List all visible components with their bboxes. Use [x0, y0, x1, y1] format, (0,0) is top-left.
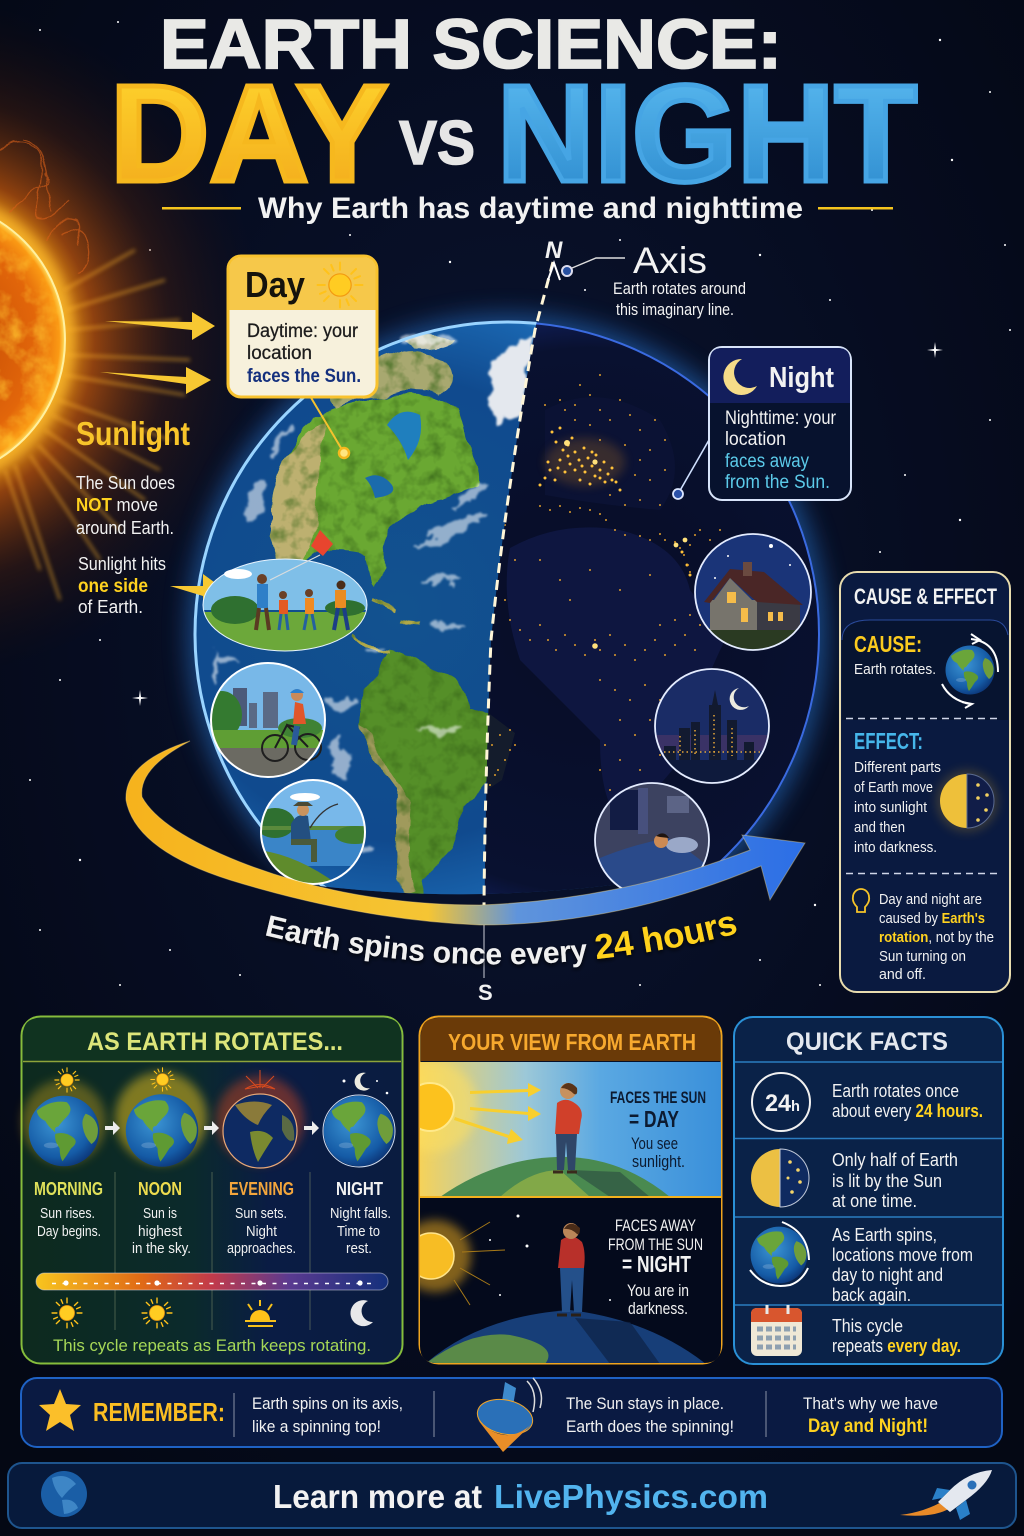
great lakes: [365, 475, 393, 498]
north america: [270, 396, 478, 590]
scene: child sleeping: [594, 782, 710, 888]
cause section: Earth rotates.: [854, 661, 936, 678]
stage: night: NIGHT: [336, 1179, 383, 1199]
night view text: You are in: [627, 1281, 689, 1300]
stage: morning: [22, 1068, 106, 1240]
south america: [357, 650, 495, 900]
footer: [8, 1463, 1016, 1528]
fact: daily cycle: repeats every day.: [832, 1335, 961, 1356]
day callout: Day: [245, 264, 305, 305]
stage: night: [323, 1073, 395, 1257]
night view: [399, 1214, 706, 1364]
europe glow: [545, 438, 625, 486]
fact: daily cycle: This cycle: [832, 1315, 903, 1336]
effect section: and then: [854, 819, 905, 836]
panel: as earth rotates: [22, 1016, 402, 1364]
stage: night: rest.: [346, 1240, 372, 1257]
fact: 24 hours: [752, 1073, 983, 1131]
fact: earth spins: locations move from: [832, 1244, 973, 1265]
sunlight text: The Sun does: [76, 472, 175, 493]
night view text: = NIGHT: [622, 1251, 691, 1277]
night view text: darkness.: [628, 1299, 688, 1318]
fact: earth spins: [750, 1222, 973, 1305]
day view text: FACES THE SUN: [610, 1088, 706, 1107]
key takeaway: rotation, not by the: [879, 929, 994, 946]
icon: spinning top: [474, 1378, 541, 1452]
stage: noon: NOON: [138, 1179, 182, 1199]
fact: earth spins: As Earth spins,: [832, 1224, 937, 1245]
earth rim: [195, 322, 819, 946]
earth day side: [196, 324, 536, 894]
stage: night: Time to: [337, 1223, 380, 1240]
cause section: CAUSE:: [854, 631, 922, 657]
scene: cyclist: [202, 660, 328, 778]
effect section: Different parts: [854, 759, 941, 776]
stage: morning: Sun rises.: [40, 1205, 95, 1222]
stage: evening: [216, 1070, 304, 1257]
fact: half of earth lit: Only half of Earth: [832, 1149, 958, 1170]
key takeaway: [853, 889, 994, 983]
caribbean and central america: [350, 600, 420, 652]
day callout: faces the Sun.: [247, 365, 361, 387]
key takeaway: Day and night are: [879, 891, 982, 908]
rotation caption: Earth spins once every 24 hours: [266, 915, 737, 970]
axis callout: Axis: [633, 240, 707, 281]
sunlight text: Sunlight: [76, 415, 190, 452]
panel footer: This cycle repeats as Earth keeps rotating.: [53, 1336, 371, 1355]
africa shadow: [507, 527, 725, 820]
key takeaway: caused by Earth's: [879, 910, 985, 927]
scene: fisherman: [260, 779, 366, 885]
stage arrows: [105, 1121, 319, 1135]
icon: star: [39, 1389, 81, 1431]
sunlight text: [76, 415, 190, 617]
stage: morning: MORNING: [34, 1179, 103, 1199]
effect section: EFFECT:: [854, 728, 923, 754]
cause section: [842, 620, 1008, 720]
stage: morning: Day begins.: [37, 1223, 101, 1240]
stage: evening: approaches.: [227, 1240, 296, 1257]
sunlight text: Sunlight hits: [78, 553, 166, 574]
night callout: location: [725, 429, 786, 450]
title word: Day: DAY: [110, 57, 388, 211]
sunlight text: NOT move: [76, 494, 158, 515]
title: [110, 5, 917, 211]
sunlight text: one side: [78, 576, 148, 597]
axis callout: Earth rotates around: [613, 279, 746, 298]
axis line: [478, 237, 563, 1005]
city lights: [490, 375, 720, 800]
stage: evening: EVENING: [229, 1179, 294, 1199]
axis callout: [562, 240, 746, 319]
day callout: location: [247, 342, 312, 364]
sun: [0, 0, 265, 680]
effect section: [854, 728, 998, 856]
night view text: [608, 1216, 703, 1318]
title line: Earth Science: EARTH SCIENCE:: [160, 5, 782, 83]
key takeaway: Sun turning on: [879, 948, 966, 965]
fact: half of earth lit: [751, 1149, 958, 1211]
panel heading: YOUR VIEW FROM EARTH: [448, 1029, 696, 1055]
fact: 24 hours: 24h: [765, 1090, 800, 1117]
banner: remember: REMEMBER:: [93, 1397, 225, 1427]
fact: 24 hours: Earth rotates once: [832, 1080, 959, 1101]
night callout: Night: [769, 362, 834, 394]
icon: globe: [41, 1471, 87, 1517]
south america night part: [487, 712, 515, 790]
title word: vs: VS: [399, 109, 475, 178]
panel: your view from earth: [388, 1016, 722, 1364]
icon: rocket: [900, 1470, 992, 1520]
sunlight text: of Earth.: [78, 596, 143, 617]
stage: noon: in the sky.: [132, 1240, 191, 1257]
hudson bay: [387, 412, 421, 460]
subtitle: Why Earth has daytime and nighttime: [258, 192, 803, 225]
time bar: [36, 1273, 388, 1290]
day view: [420, 1062, 721, 1196]
earth: [187, 314, 827, 954]
sunlight text: around Earth.: [76, 517, 174, 538]
fact: daily cycle: [751, 1305, 961, 1356]
day view text: sunlight.: [632, 1152, 685, 1171]
stage: noon: highest: [138, 1223, 183, 1240]
boy in daylight: [553, 1083, 582, 1172]
scene: house at night: [695, 534, 811, 652]
night callout: from the Sun.: [725, 472, 830, 493]
time icons: [52, 1298, 373, 1328]
sunlight arrows: [100, 312, 225, 606]
banner: remember: Earth spins on its axis,: [252, 1394, 403, 1413]
night view text: FACES AWAY: [615, 1216, 696, 1235]
night callout: Nighttime: your: [725, 408, 837, 429]
panel heading: QUICK FACTS: [786, 1028, 948, 1056]
panel heading: AS EARTH ROTATES...: [87, 1028, 343, 1056]
day view text: = DAY: [629, 1106, 679, 1132]
day view text: [610, 1088, 706, 1171]
panel: cause and effect: [840, 572, 1010, 992]
stage: evening: Sun sets.: [235, 1205, 287, 1222]
key takeaway: and off.: [879, 966, 926, 983]
north pole label: N: [545, 237, 563, 264]
effect section: into darkness.: [854, 839, 937, 856]
title word: Night: NIGHT: [497, 57, 917, 211]
axis callout: this imaginary line.: [616, 300, 734, 319]
night callout: faces away: [725, 451, 809, 472]
boy at night: [557, 1223, 585, 1315]
greenland: [487, 335, 532, 425]
south pole label: S: [478, 980, 493, 1005]
banner: remember: Day and Night!: [808, 1416, 928, 1437]
fact: earth spins: day to night and: [832, 1264, 943, 1285]
footer: LivePhysics.com: [494, 1478, 768, 1515]
night callout: [673, 347, 851, 500]
fact: earth spins: back again.: [832, 1284, 911, 1305]
earth night side: [484, 324, 818, 894]
fact: half of earth lit: is lit by the Sun: [832, 1170, 942, 1191]
stage: night: Night falls.: [330, 1205, 391, 1222]
fact: half of earth lit: at one time.: [832, 1190, 917, 1211]
day callout: [228, 256, 377, 458]
stage: noon: Sun is: [143, 1205, 177, 1222]
stage: noon: [115, 1068, 207, 1257]
effect section: of Earth move: [854, 779, 933, 796]
stage: evening: Night: [246, 1223, 278, 1240]
day callout: Daytime: your: [247, 320, 358, 342]
footer: Learn more at: [273, 1478, 482, 1515]
panel: quick facts: [734, 1017, 1003, 1364]
rotation arrow: [126, 741, 805, 925]
fact: 24 hours: about every 24 hours.: [832, 1100, 983, 1121]
banner: remember: Earth does the spinning!: [566, 1417, 734, 1436]
banner: remember: That's why we have: [803, 1394, 938, 1413]
arctic islands: [330, 351, 451, 410]
scene: city at night: [654, 668, 770, 785]
clouds: [212, 335, 488, 854]
effect section: into sunlight: [854, 799, 928, 816]
day view text: You see: [631, 1134, 678, 1153]
star field: [29, 21, 1011, 986]
europe shadow: [545, 463, 672, 510]
banner: remember: [21, 1378, 1002, 1452]
banner: remember: The Sun stays in place.: [566, 1394, 724, 1413]
scene: family flying a kite: [200, 530, 370, 658]
night view text: FROM THE SUN: [608, 1235, 703, 1254]
banner: remember: like a spinning top!: [252, 1417, 381, 1436]
